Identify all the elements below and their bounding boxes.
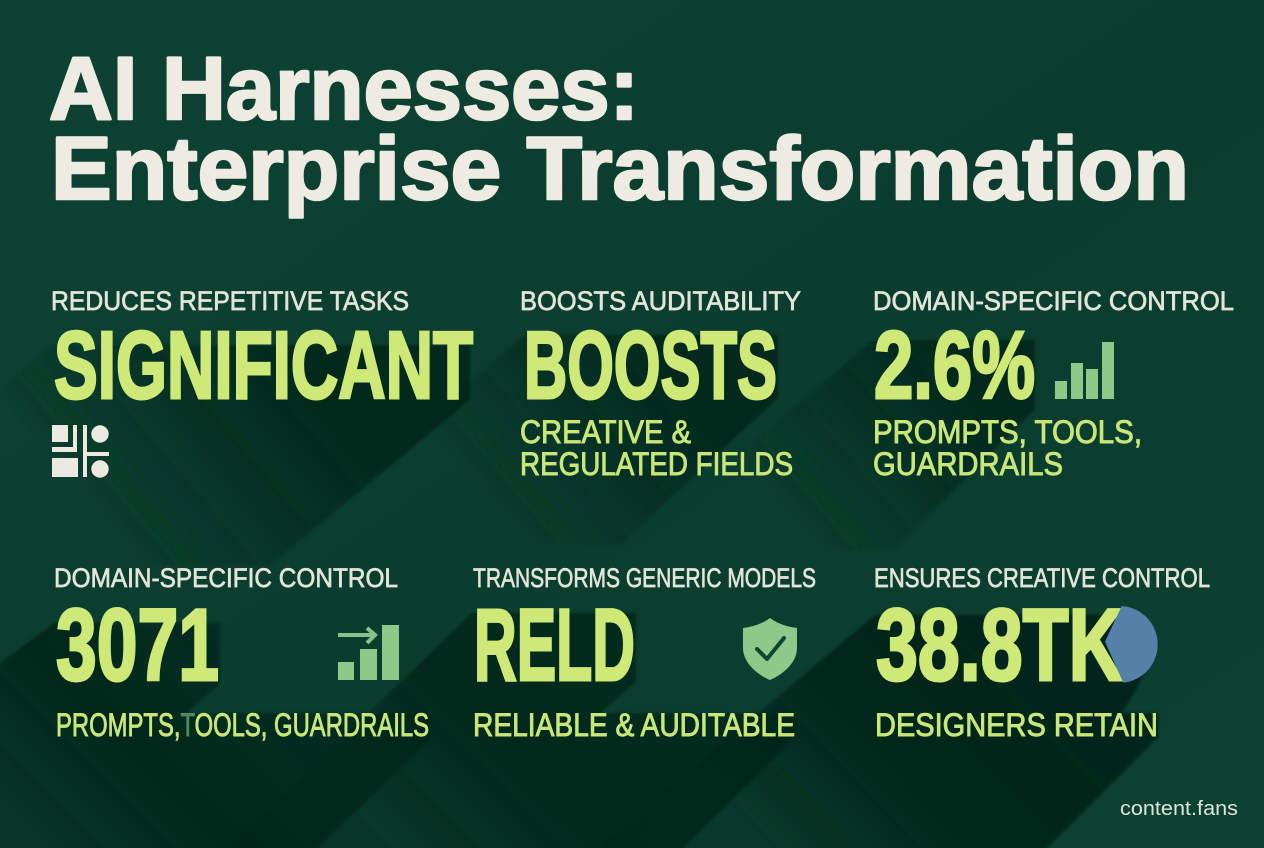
- big value: BOOSTS: [524, 312, 777, 419]
- sub text: [520, 414, 793, 482]
- icon: blue pie: [1105, 606, 1158, 683]
- label: TRANSFORMS GENERIC MODELS: [473, 563, 816, 593]
- panel: domain-specific control 3071: [54, 563, 429, 743]
- sub text: CREATIVE &: [520, 414, 691, 450]
- label: REDUCES REPETITIVE TASKS: [51, 286, 409, 316]
- sub text: REGULATED FIELDS: [520, 446, 793, 482]
- sub text: [873, 414, 1142, 482]
- sub text: RELIABLE & AUDITABLE: [473, 707, 795, 743]
- sub text: DESIGNERS RETAIN: [875, 707, 1158, 743]
- icon: bar chart: [1055, 342, 1114, 399]
- title: AI Harnesses:: [49, 38, 639, 138]
- big value: SIGNIFICANT: [54, 312, 473, 419]
- label: BOOSTS AUDITABILITY: [520, 286, 801, 316]
- icon: shield with check: [743, 618, 797, 680]
- panel: domain-specific control 2.6%: [873, 286, 1234, 482]
- big value: 2.6%: [874, 312, 1035, 419]
- watermark: content.fans: [1120, 798, 1238, 820]
- sub text: GUARDRAILS: [873, 446, 1063, 482]
- panel: transforms generic models: [473, 563, 816, 743]
- icon: bars with arrow: [338, 625, 399, 680]
- big value: 38.8TK: [876, 588, 1123, 702]
- panel: ensures creative control: [874, 563, 1210, 743]
- sub text: PROMPTS,TOOLS, GUARDRAILS: [56, 707, 429, 743]
- big value: 3071: [56, 588, 219, 702]
- sub text: PROMPTS, TOOLS,: [873, 414, 1142, 450]
- panel: reduces repetitive tasks: [51, 286, 473, 478]
- panel: boosts auditability: [520, 286, 801, 482]
- title: [49, 38, 1189, 218]
- long diagonal shadows: [0, 335, 1158, 848]
- icon: modular blocks: [52, 425, 109, 478]
- label: DOMAIN-SPECIFIC CONTROL: [54, 563, 398, 593]
- label: DOMAIN-SPECIFIC CONTROL: [873, 286, 1234, 316]
- title: Enterprise Transformation: [51, 118, 1189, 218]
- big value: RELD: [474, 588, 635, 702]
